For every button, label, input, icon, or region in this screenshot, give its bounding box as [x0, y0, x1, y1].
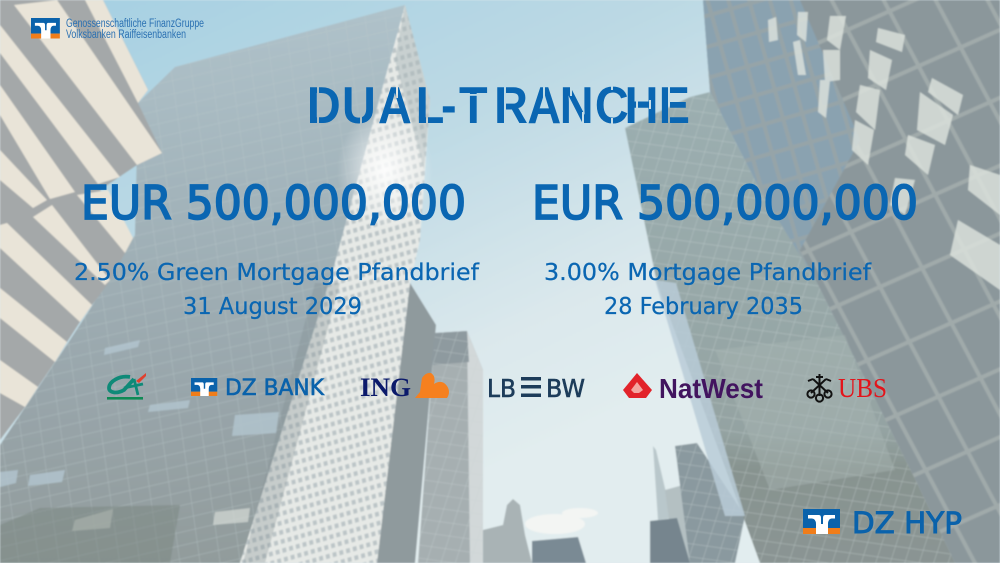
building: cream left tower — [0, 0, 162, 440]
description left: 2.50% Green Mortgage Pfandbrief — [74, 260, 480, 286]
logo: Credit Agricole — [107, 373, 146, 400]
bank logos row — [107, 373, 887, 404]
logo: ING — [360, 373, 449, 402]
building: far right tower — [703, 0, 1000, 563]
logo: LBBW: LB — [487, 374, 516, 403]
building: mid tower — [418, 331, 483, 563]
tranche right — [532, 176, 918, 320]
logo: LBBW: BW — [546, 374, 585, 403]
amount left: EUR 500,000,000 — [81, 176, 466, 230]
date right: 28 February 2035 — [604, 294, 803, 320]
amount right: EUR 500,000,000 — [532, 176, 918, 230]
logo: DZ HYP — [803, 506, 962, 540]
building: right tower — [625, 92, 955, 563]
cloud — [525, 508, 598, 534]
window reflections — [768, 12, 1000, 290]
logo: LBBW — [487, 374, 585, 403]
building: distant towers centre — [483, 499, 586, 563]
logo: DZ BANK: DZ BANK — [225, 376, 325, 401]
tranche left — [74, 176, 480, 320]
logo text: DZ HYP — [852, 506, 962, 540]
logo: UBS: UBS — [838, 373, 887, 403]
building: central tower dark side — [377, 283, 436, 563]
description right: 3.00% Mortgage Pfandbrief — [544, 260, 872, 286]
logo: NatWest: NatWest — [659, 373, 763, 404]
building: central tower sunlit face — [240, 5, 433, 563]
building: central tower main face — [0, 5, 405, 563]
title: DUAL-TRANCHE — [307, 77, 690, 135]
logo text — [66, 18, 204, 41]
icon: VR logo large — [803, 509, 840, 534]
date left: 31 August 2029 — [183, 294, 362, 320]
logo text: Genossenschaftliche FinanzGruppe — [66, 18, 204, 30]
logo: Genossenschaftliche FinanzGruppe — [31, 18, 204, 41]
logo: ING: ING — [360, 373, 411, 402]
icon: VR logo small — [31, 18, 60, 38]
logo: UBS — [807, 373, 887, 403]
building: distant towers right — [650, 443, 745, 563]
logo text: Volksbanken Raiffeisenbanken — [66, 29, 186, 41]
